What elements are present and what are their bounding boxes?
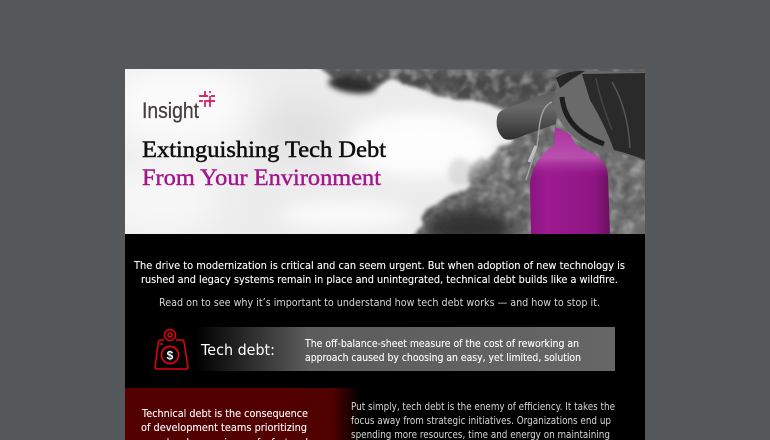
- gloved hand and sleeve: [553, 71, 645, 162]
- extinguisher bottle: [530, 127, 610, 234]
- logo: Insight: Insight: [142, 98, 199, 123]
- definition text: The off-balance-sheet measure of the cost of reworking an: [304, 338, 579, 350]
- callout text: [141, 407, 308, 440]
- definition bar: approach caused by choosing an easy, yet limited, solution: [305, 352, 581, 364]
- definition bar: [195, 327, 615, 371]
- body text block: [351, 401, 615, 440]
- heading: Tech debt: Tech debt:: [200, 341, 275, 359]
- callout text: Technical debt is the consequence: [141, 407, 308, 420]
- body text block: Put simply, tech debt is the enemy of efficiency. It takes the: [351, 401, 615, 413]
- logo: Insight: [142, 91, 215, 123]
- intro text: [133, 259, 625, 309]
- panel: red callout: [125, 388, 360, 440]
- extinguisher nozzle: [497, 89, 558, 140]
- icon: red weight with dollar sign: $: [167, 348, 174, 362]
- intro text: The drive to modernization is critical and can seem urgent. But when adoption of new technology is: [133, 259, 625, 272]
- title: [142, 137, 386, 191]
- callout text: of development teams prioritizing: [141, 421, 307, 434]
- body text block: focus away from strategic initiatives. Organizations end up: [351, 415, 611, 427]
- subtitle: From Your Environment: [142, 165, 381, 191]
- smoke cloud: [125, 69, 516, 234]
- panel: infographic page: [125, 69, 645, 440]
- icon: red weight with dollar sign: [155, 330, 188, 369]
- hero image: fire extinguisher spraying smoke: [125, 69, 645, 234]
- title: Extinguishing Tech Debt: [142, 137, 386, 163]
- dark terrain above smoke: [327, 74, 377, 96]
- pin and wire: [526, 102, 552, 180]
- intro text: Read on to see why it’s important to understand how tech debt works — and how to stop it.: [159, 296, 600, 309]
- intro text: rushed and legacy systems remain in place and unintegrated, technical debt builds like a wildfire.: [141, 273, 618, 286]
- icon: Insight hash mark: [199, 91, 215, 107]
